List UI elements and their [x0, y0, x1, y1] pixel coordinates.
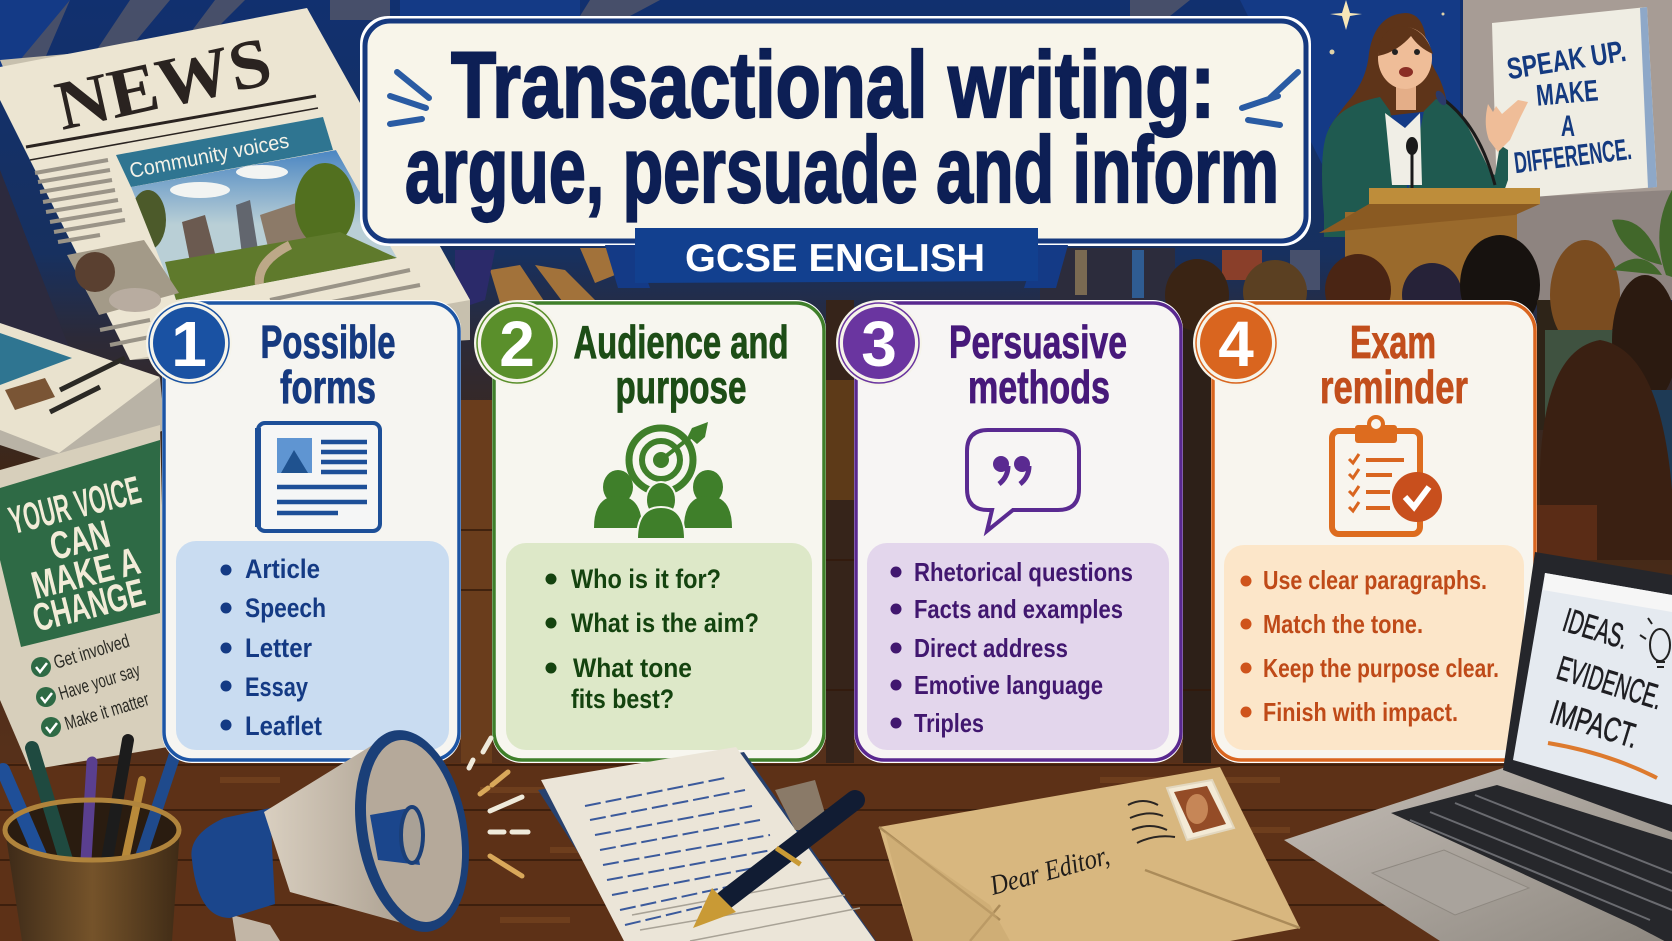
heading: Persuasive	[949, 316, 1127, 368]
poster: speak up: A	[1561, 110, 1575, 143]
wall and poster	[1330, 0, 1672, 300]
plant	[1612, 190, 1672, 277]
screen text: ideas evidence impact	[1546, 601, 1667, 756]
heading	[574, 316, 788, 413]
heading: Audience and	[574, 316, 788, 368]
heading: reminder	[1320, 361, 1468, 413]
icon: speech bubble	[967, 430, 1079, 531]
badge 4	[1193, 300, 1279, 386]
panel: audience questions: fits best?	[571, 684, 674, 714]
notebook with handwriting	[538, 747, 876, 941]
icon: light bulb	[1640, 618, 1670, 667]
poster checklist: Get involved	[51, 631, 132, 674]
panel: audience questions: Who is it for?	[571, 564, 721, 594]
fountain pen	[693, 800, 855, 928]
panel: audience questions: What is the aim?	[571, 608, 759, 638]
panel: list of forms: Leaflet	[245, 711, 322, 741]
panel: persuasive methods list: Rhetorical questions	[914, 557, 1133, 587]
hand	[1486, 100, 1528, 152]
panel: list of forms	[176, 541, 449, 750]
title text	[405, 32, 1279, 222]
badge 4: 4	[1218, 308, 1254, 380]
badge 2: 2	[499, 308, 535, 380]
newspaper park photo	[130, 150, 397, 300]
panel: exam tips: Use clear paragraphs.	[1263, 565, 1487, 595]
hair	[1329, 13, 1449, 128]
badge 1: 1	[171, 308, 207, 380]
microphones	[1412, 99, 1495, 188]
stamp	[1167, 780, 1234, 840]
envelope text: Dear Editor: Dear Editor,	[986, 840, 1113, 902]
laptop	[1284, 552, 1672, 941]
panel: list of forms: Letter	[245, 633, 312, 663]
podium	[1319, 188, 1540, 302]
blazer	[1322, 97, 1508, 237]
small newspaper stack	[0, 323, 165, 465]
panel: exam tips: Match the tone.	[1263, 609, 1423, 639]
heading	[949, 316, 1127, 413]
icon: target and audience	[594, 422, 732, 539]
sound lines	[469, 738, 528, 876]
panel: persuasive methods list: Direct address	[914, 633, 1068, 663]
panel: exam tips: Keep the purpose clear.	[1263, 653, 1499, 683]
heading: Exam	[1350, 316, 1436, 368]
speaker at podium	[1319, 13, 1540, 302]
panel: exam tips	[1224, 545, 1524, 750]
panel: persuasive methods list: Facts and examples	[914, 594, 1123, 624]
icon: right sparks	[1242, 72, 1298, 125]
poster: speak up: MAKE	[1535, 74, 1599, 113]
heading: methods	[968, 361, 1110, 413]
newspaper pile with NEWS front page	[0, 8, 470, 400]
poster: your voice can make a change: CAN	[46, 513, 114, 569]
poster: your voice can make a change: YOUR VOICE	[5, 469, 145, 543]
community voices banner: Community voices	[128, 129, 291, 183]
panel: persuasive methods list	[867, 543, 1169, 750]
poster: speak up	[1492, 7, 1657, 200]
poster: your voice can make a change	[0, 425, 168, 770]
badge 3: 3	[861, 308, 897, 380]
poster: your voice can make a change: CHANGE	[28, 571, 149, 641]
panel: list of forms: Essay	[245, 672, 308, 702]
audience heads	[1165, 235, 1672, 560]
panel: list of forms: Speech	[245, 593, 326, 623]
badge 1	[146, 300, 232, 386]
poster: your voice can make a change: MAKE A	[27, 540, 145, 608]
community voices banner	[116, 117, 333, 187]
ribbon: GCSE English: GCSE ENGLISH	[685, 237, 985, 280]
panel: audience questions	[506, 543, 812, 750]
heading	[260, 316, 396, 413]
heading: purpose	[616, 361, 746, 413]
newspaper portrait photo	[67, 240, 179, 315]
panel: audience questions: What tone	[573, 653, 692, 683]
panel: persuasive methods list: Emotive language	[914, 670, 1103, 700]
badge 3	[836, 300, 922, 386]
heading: forms	[280, 361, 376, 413]
poster checklist: Make it matter	[62, 689, 152, 735]
poster checklist: Have your say	[56, 660, 143, 705]
pen pot	[3, 740, 180, 941]
megaphone	[191, 721, 528, 941]
envelope	[879, 767, 1300, 941]
panel: persuasive methods list: Triples	[914, 708, 984, 738]
card 2: audience and purpose	[492, 300, 826, 763]
icon: clipboard checklist	[1332, 417, 1442, 534]
panel: list of forms: Article	[245, 554, 320, 584]
icon: left sparks	[390, 72, 429, 124]
card 3: persuasive methods	[854, 300, 1183, 763]
panel: exam tips: Finish with impact.	[1263, 697, 1458, 727]
heading: Possible	[260, 316, 396, 368]
shirt	[1385, 113, 1422, 185]
star	[1330, 0, 1444, 54]
masthead: NEWS: NEWS	[49, 23, 278, 146]
card 1: possible forms	[162, 300, 461, 763]
card 4: exam reminder	[1211, 300, 1537, 763]
title text: argue, persuade and inform	[405, 117, 1279, 222]
ribbon: GCSE English	[605, 228, 1068, 288]
title text: Transactional writing:	[451, 32, 1215, 137]
title box	[360, 16, 1311, 246]
icon: news article	[258, 423, 380, 531]
heading	[1320, 316, 1468, 413]
badge 2	[474, 300, 560, 386]
poster: speak up: SPEAK UP.	[1505, 35, 1628, 86]
face	[1396, 78, 1416, 110]
poster checklist	[31, 631, 152, 737]
